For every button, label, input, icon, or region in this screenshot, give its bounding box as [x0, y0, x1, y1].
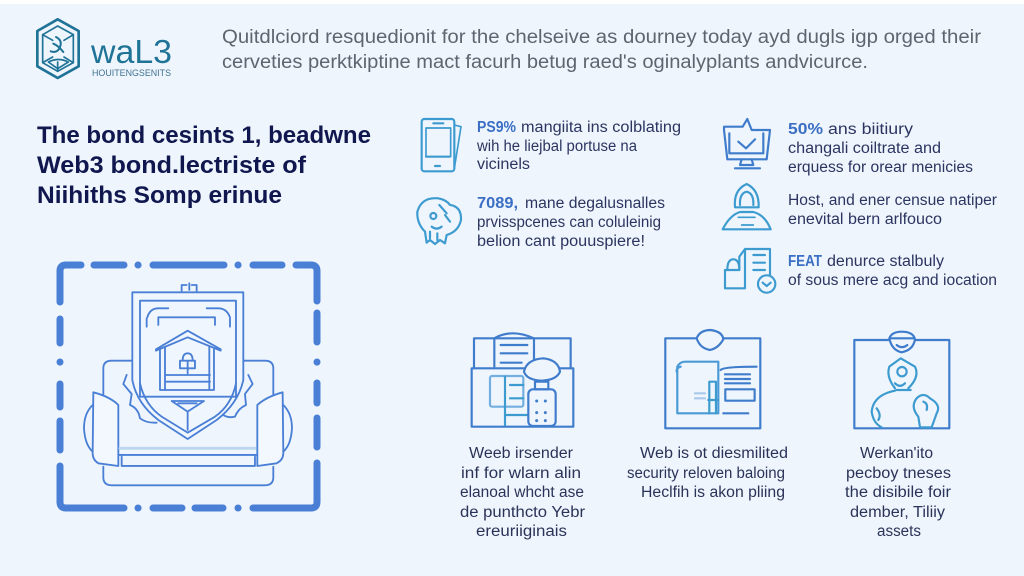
stat text — [788, 192, 997, 228]
stat text: 7089, — [477, 195, 518, 212]
stat text — [788, 253, 997, 289]
icon: logo hexagon — [37, 19, 79, 78]
illustration: shield on sofa in dashed frame — [60, 265, 317, 508]
stat text: mangiita ins colblating — [521, 119, 681, 136]
icon: ghost head — [417, 198, 461, 244]
stat text — [476, 119, 681, 173]
logo tagline: HOUITENGSENITS — [92, 68, 171, 78]
card text — [460, 445, 585, 540]
card text: pecboy tneses — [846, 465, 951, 482]
stat text: FEAT — [788, 253, 822, 270]
stat text: vicinels — [477, 156, 530, 173]
card text: Weeb irsender — [469, 445, 573, 462]
icon: framed document — [665, 330, 760, 428]
stat: phone — [422, 119, 681, 173]
card: bottom middle — [627, 330, 788, 501]
stat text: wih he liejbal portuse na — [476, 138, 637, 155]
header intro text: cerveties perktkiptine mact facurh betug raed's oginalyplants andvicurce. — [222, 52, 868, 73]
icon: document with lock — [725, 249, 775, 293]
stat text: Host, and ener censue natiper — [788, 192, 997, 209]
card text: elanoal whcht ase — [460, 484, 584, 501]
shield — [132, 283, 243, 439]
stat: ghost — [417, 195, 665, 250]
stat text: mane degalusnalles — [525, 195, 665, 212]
stat text: PS9% — [477, 119, 516, 136]
stat text: changali coiltrate and — [788, 140, 941, 157]
logo wordmark: waL3 — [90, 33, 172, 70]
card: bottom left — [460, 333, 585, 540]
title — [37, 122, 371, 209]
icon: person with helmet — [723, 184, 771, 229]
stat: document lock — [725, 249, 997, 293]
card: bottom right — [845, 332, 951, 540]
card text: Werkan'ito — [860, 445, 933, 462]
sofa — [84, 361, 292, 485]
header intro text: Quitdlciord resquedionit for the chelseive as dourney today ayd dugls igp orged their — [222, 27, 982, 48]
stat text — [788, 121, 973, 176]
card text: Web is ot diesmilited — [640, 445, 788, 462]
card text: assets — [877, 523, 921, 540]
card text: the disibile foir — [845, 484, 951, 501]
icon: documents and device — [472, 333, 573, 427]
title: The bond cesints 1, beadwne — [37, 122, 371, 149]
card text: dember, Tiliiy — [850, 504, 945, 521]
stat text: denurce stalbuly — [827, 253, 944, 270]
stat text: erquess for orear menicies — [788, 159, 973, 176]
stat text: belion cant pouuspiere! — [477, 233, 645, 250]
card text: security reloven baloing — [627, 465, 785, 482]
icon: phone — [422, 119, 461, 171]
stat text: 50% — [788, 121, 823, 138]
stat text: prvisspcenes can coluleinig — [477, 214, 661, 231]
stat text — [477, 195, 665, 250]
card text: Heclfih is akon pliing — [641, 484, 785, 501]
stat text: of sous mere acg and iocation — [788, 272, 997, 289]
stat text: enevital bern arlfouco — [788, 211, 942, 228]
stat: host — [723, 184, 997, 229]
stat text: ans biitiury — [828, 121, 913, 138]
card text — [845, 445, 951, 540]
header intro text — [222, 27, 982, 73]
logo — [37, 19, 172, 78]
icon: framed figures — [854, 332, 949, 428]
card text: inf for wlarn alin — [461, 465, 581, 482]
dashed frame — [60, 265, 317, 508]
card text — [627, 445, 788, 501]
icon: monitor with check — [724, 119, 770, 168]
card text: ereuriiginais — [476, 523, 567, 540]
title: Web3 bond.lectriste of — [37, 152, 307, 179]
stat: monitor — [724, 119, 973, 176]
title: Niihiths Somp erinue — [37, 182, 282, 209]
card text: de punthcto Yebr — [460, 504, 585, 521]
